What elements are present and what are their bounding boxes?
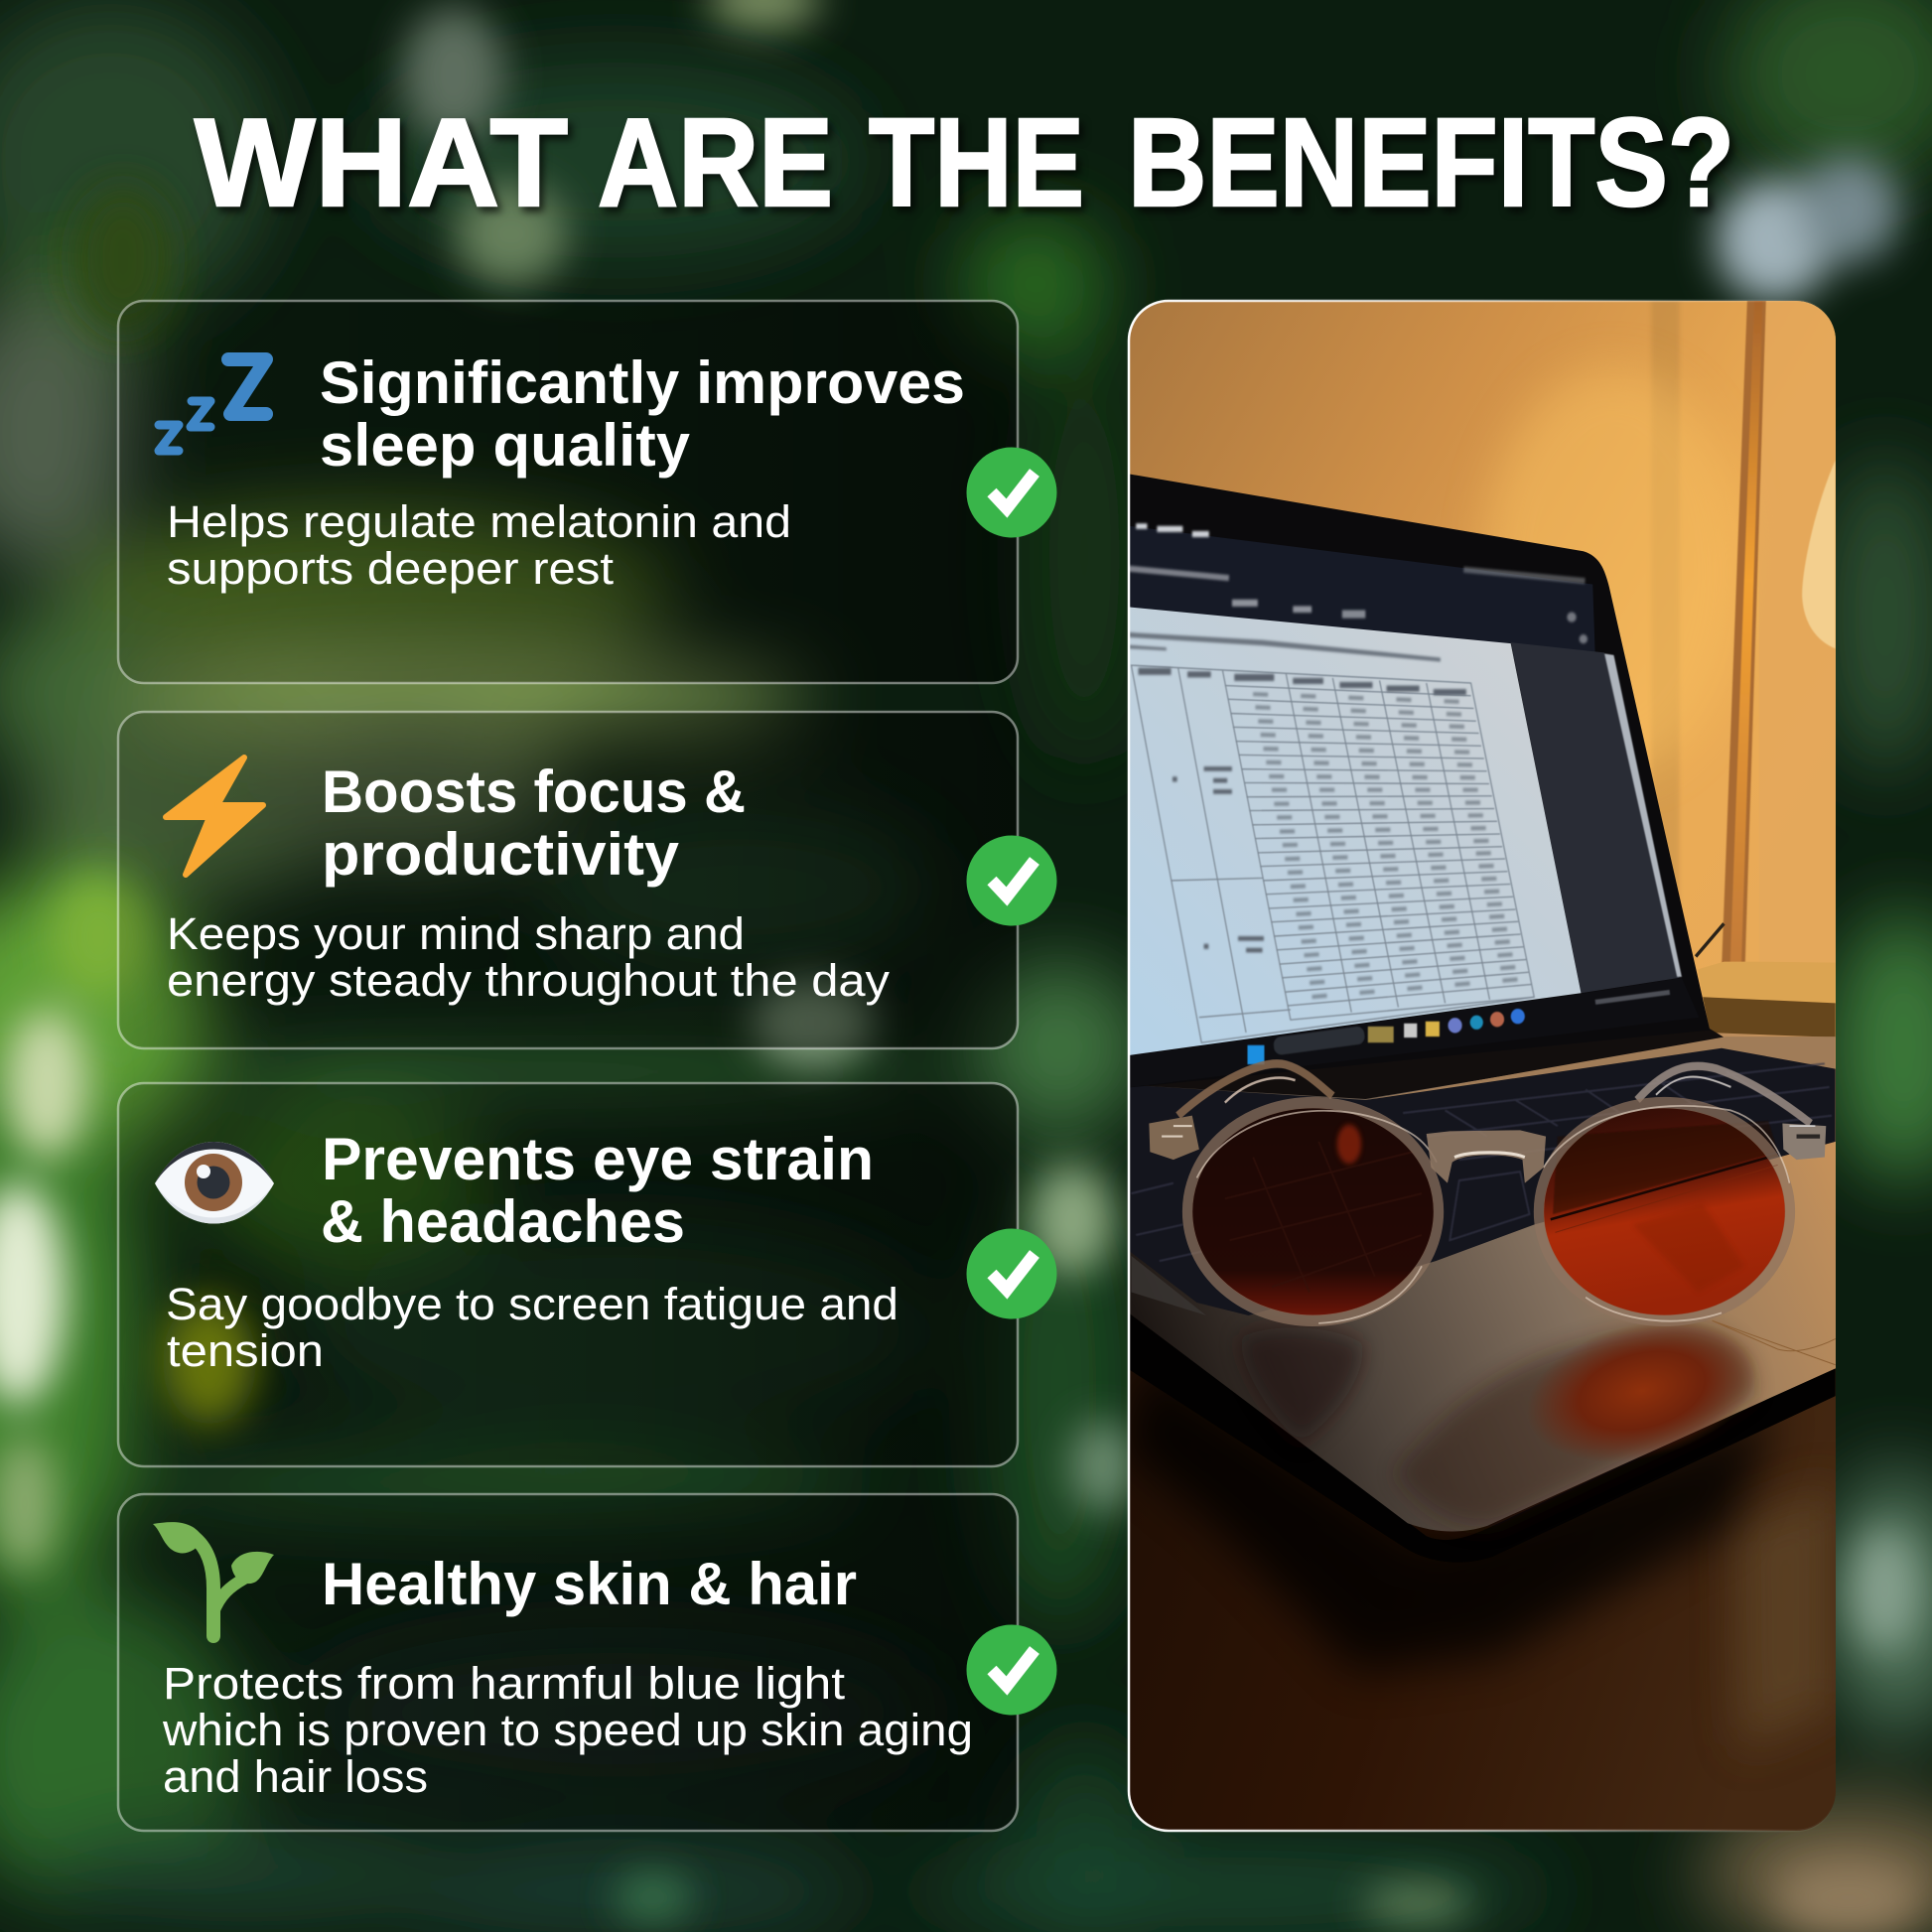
title: ARE bbox=[598, 92, 833, 232]
panel: focus and productivity bbox=[118, 712, 1056, 1048]
icon: sprout bbox=[153, 1522, 274, 1636]
laptop lid and screen bbox=[1122, 473, 1710, 1088]
description: Keeps your mind sharp and bbox=[167, 908, 745, 959]
icon: green check bbox=[967, 1229, 1056, 1318]
card background bbox=[118, 1083, 1018, 1466]
right lens bbox=[1544, 1108, 1785, 1315]
left lens bbox=[1192, 1108, 1434, 1315]
taskbar bbox=[1122, 978, 1699, 1088]
description bbox=[166, 1279, 898, 1376]
description: energy steady throughout the day bbox=[167, 955, 891, 1006]
card background bbox=[118, 301, 1018, 683]
panel: eye strain bbox=[118, 1083, 1056, 1466]
title: WHAT bbox=[195, 92, 568, 232]
description: and hair loss bbox=[163, 1751, 428, 1802]
title: BENEFITS? bbox=[1128, 92, 1734, 232]
icon: zzz bbox=[159, 359, 266, 451]
heading: Boosts focus & bbox=[322, 759, 746, 825]
laptop deck and keyboard bbox=[1122, 1028, 1844, 1531]
icon: lightning bolt bbox=[166, 758, 263, 875]
description: Helps regulate melatonin and bbox=[167, 496, 791, 547]
heading bbox=[320, 349, 965, 479]
heading: Significantly improves bbox=[320, 349, 965, 416]
frame bbox=[1187, 1103, 1790, 1320]
icon: green check bbox=[967, 1624, 1056, 1716]
description: tension bbox=[167, 1325, 324, 1376]
bridge and hinges bbox=[1427, 1130, 1546, 1183]
description bbox=[167, 908, 891, 1006]
description: supports deeper rest bbox=[167, 543, 615, 594]
data table on screen bbox=[1131, 665, 1534, 1042]
card background bbox=[118, 1494, 1018, 1831]
heading: sleep quality bbox=[320, 412, 691, 479]
icon: eye bbox=[155, 1142, 274, 1223]
card background bbox=[118, 712, 1018, 1048]
heading: Prevents eye strain bbox=[322, 1126, 874, 1192]
description bbox=[167, 496, 791, 594]
description bbox=[162, 1658, 973, 1802]
title: THE bbox=[869, 92, 1084, 232]
icon: green check bbox=[967, 836, 1056, 925]
photo: red-tinted glasses on a laptop bbox=[1122, 288, 1857, 1915]
icon: green check bbox=[967, 447, 1056, 538]
title bbox=[195, 92, 1734, 232]
heading bbox=[321, 1126, 874, 1255]
panel: skin and hair bbox=[118, 1494, 1056, 1831]
heading: productivity bbox=[322, 821, 680, 888]
heading: & headaches bbox=[321, 1188, 685, 1255]
glasses bbox=[1149, 1063, 1826, 1323]
description: Say goodbye to screen fatigue and bbox=[166, 1279, 898, 1329]
panel: sleep quality bbox=[118, 301, 1056, 683]
description: which is proven to speed up skin aging bbox=[162, 1705, 973, 1755]
wall and lamp bbox=[1130, 301, 1836, 1037]
temple arms bbox=[1178, 1063, 1811, 1124]
heading bbox=[322, 759, 746, 888]
description: Protects from harmful blue light bbox=[163, 1658, 846, 1709]
heading: Healthy skin & hair bbox=[322, 1551, 857, 1617]
screen header text bbox=[1129, 632, 1441, 662]
table surface bbox=[1130, 1314, 1836, 1831]
